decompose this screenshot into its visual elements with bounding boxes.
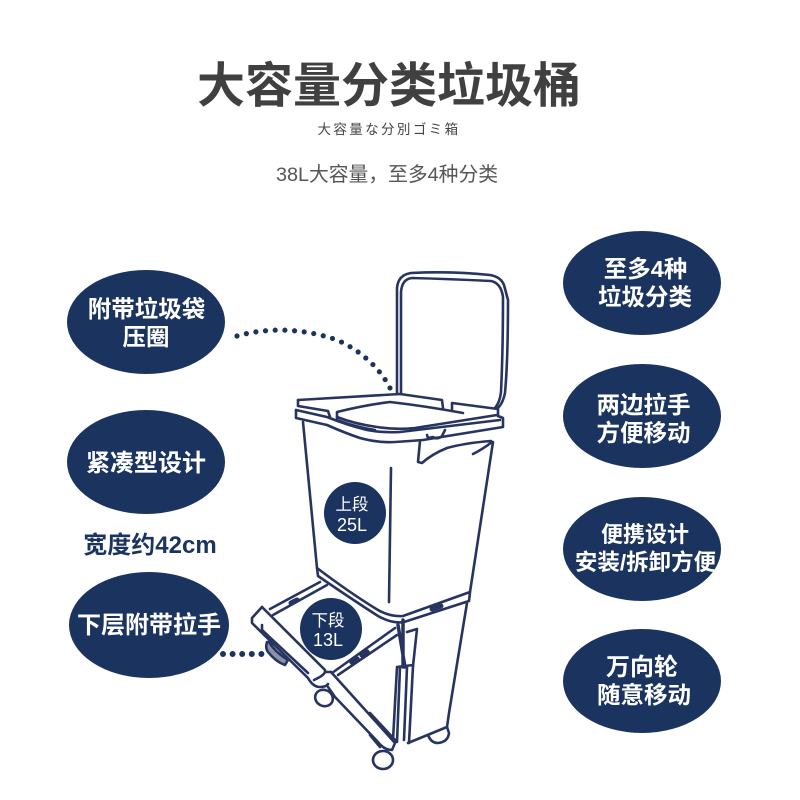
label: lower 13L: 下段 bbox=[312, 611, 344, 630]
upper rim bbox=[296, 394, 503, 442]
side handle bbox=[418, 430, 492, 463]
left badge: lower handle: 下层附带拉手 bbox=[77, 611, 221, 639]
center channel bbox=[393, 620, 417, 743]
upper center line bbox=[389, 468, 391, 602]
label: lower 13L bbox=[300, 598, 362, 660]
left badge: lower handle bbox=[69, 572, 229, 678]
drawer handle bbox=[266, 642, 288, 665]
width note: 宽度约42cm bbox=[83, 532, 217, 559]
dotted leader: lower bbox=[223, 651, 262, 657]
illustration: two-tier bin bbox=[252, 272, 508, 769]
right badge: sorting bbox=[563, 231, 721, 335]
right badge: handles: 方便移动 bbox=[596, 419, 690, 446]
latch bbox=[432, 606, 441, 609]
right badge: sorting: 垃圾分类 bbox=[598, 283, 692, 310]
right badge: casters bbox=[563, 629, 721, 733]
left badge: compact: 紧凑型设计 bbox=[86, 450, 206, 477]
label: upper 25L: 25L bbox=[337, 515, 367, 535]
title: 大容量分类垃圾桶 bbox=[197, 60, 581, 113]
drawer inner floor lines bbox=[370, 713, 396, 747]
drawer front panel bbox=[252, 607, 395, 750]
right badge: easy install bbox=[563, 497, 721, 601]
left badge: liner ring: 压圈 bbox=[122, 324, 170, 350]
right badge: handles: 两边拉手 bbox=[596, 391, 690, 418]
left badge: liner ring: 附带垃圾袋 bbox=[88, 295, 205, 322]
right badge: easy install: 便携设计 bbox=[601, 522, 689, 547]
label: upper 25L: 上段 bbox=[336, 495, 368, 514]
right badge: handles bbox=[563, 364, 721, 468]
right badge: casters: 万向轮 bbox=[606, 654, 678, 681]
upper body bbox=[303, 422, 493, 616]
subtitle in Japanese: 大容量な分別ゴミ箱 bbox=[317, 122, 461, 137]
upper base rim bbox=[317, 568, 470, 622]
right badge: sorting: 至多4种 bbox=[604, 256, 687, 282]
lid bbox=[397, 272, 508, 408]
capacity description: 38L大容量，至多4种分类 bbox=[276, 164, 498, 186]
dotted leader: upper bbox=[237, 330, 390, 388]
left badge: liner ring bbox=[67, 270, 225, 374]
right badge: easy install: 安装/拆卸方便 bbox=[575, 549, 717, 575]
open drawer sides bbox=[270, 582, 327, 615]
lower body bbox=[408, 603, 467, 743]
left badge: compact bbox=[67, 410, 225, 514]
right badge: casters: 随意移动 bbox=[597, 681, 691, 708]
casters bbox=[312, 687, 449, 769]
label: upper 25L bbox=[324, 482, 386, 544]
label: lower 13L: 13L bbox=[313, 630, 343, 650]
